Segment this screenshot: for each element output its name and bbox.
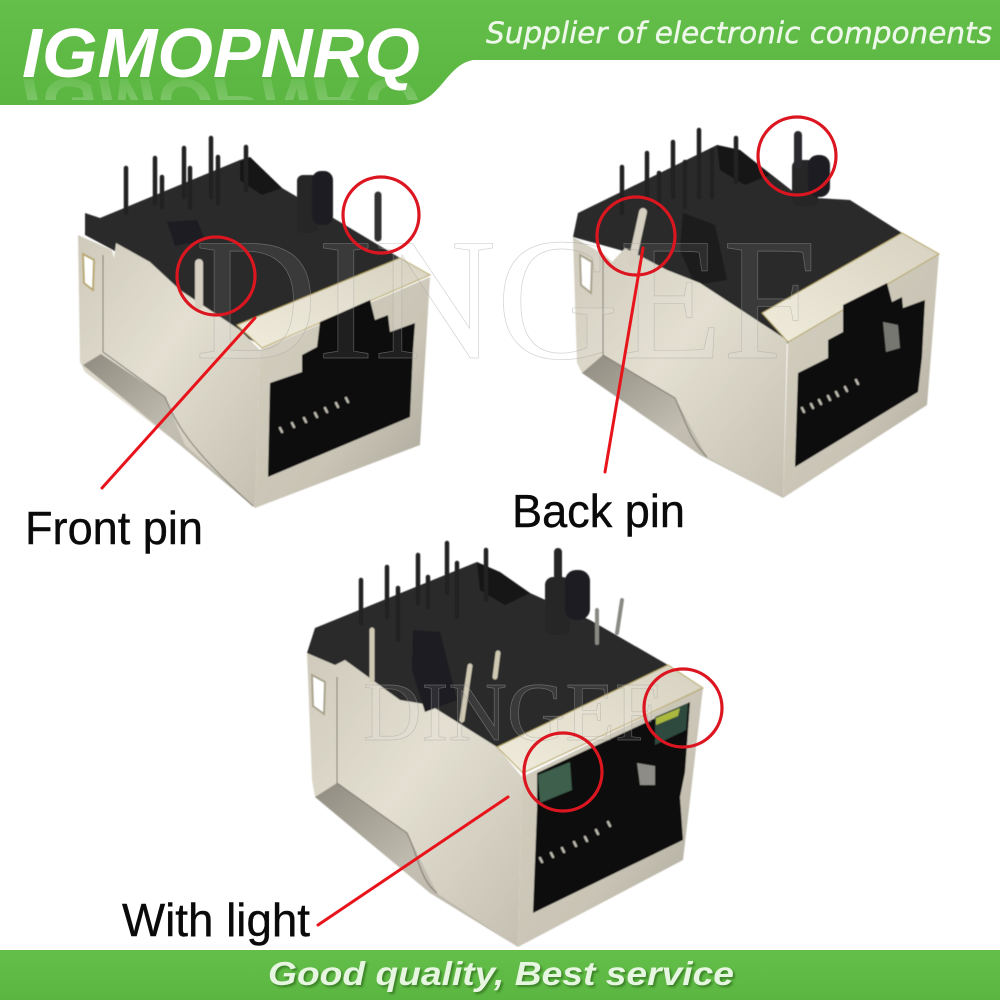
highlight circle: front pin top	[343, 177, 419, 253]
arrow: with light	[318, 797, 508, 925]
footer slogan shadow: Good quality, Best service	[270, 957, 736, 994]
header banner	[0, 0, 1000, 105]
watermark: bottom: DINGEF	[363, 666, 660, 759]
supplier tagline: Supplier of electronic components	[486, 16, 992, 50]
footer banner	[0, 950, 1000, 1000]
footer slogan: Good quality, Best service	[268, 955, 734, 992]
label: back pin: Back pin	[512, 485, 685, 537]
highlight circle: right LED	[644, 669, 722, 747]
connector: with light	[307, 543, 703, 947]
highlight circle: back pin	[597, 197, 675, 275]
highlight circle: front pin	[177, 237, 255, 315]
connector: back pin	[573, 130, 939, 498]
brand reflection: IGMOPNRQ	[22, 64, 420, 142]
label: with light: With light	[122, 894, 310, 946]
brand name: IGMOPNRQ	[22, 14, 420, 92]
highlight circle: left LED	[524, 733, 602, 811]
highlight circle: back pin top	[758, 117, 836, 195]
connector: front pin	[78, 138, 430, 508]
watermark: top: DINGEF	[195, 202, 817, 396]
arrow: back pin	[605, 248, 643, 472]
arrow: front pin	[102, 318, 255, 488]
label: front pin: Front pin	[25, 502, 203, 554]
